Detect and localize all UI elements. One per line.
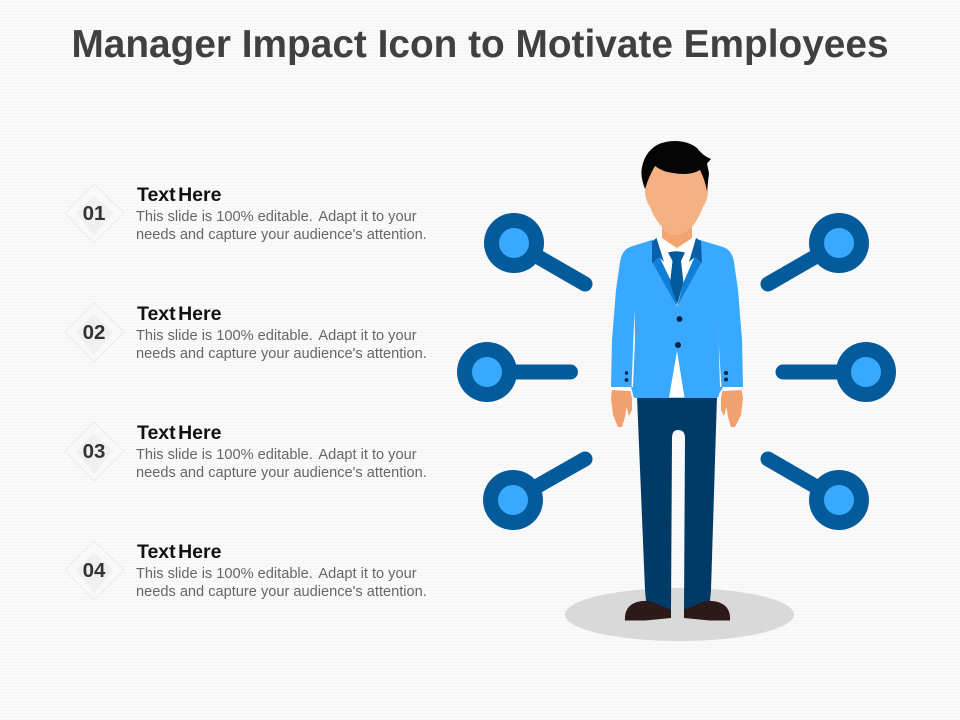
- heading 01: Text Here: [137, 184, 221, 206]
- heading 02: Text Here: [137, 303, 221, 325]
- face: [645, 158, 708, 235]
- body text 04: [136, 566, 427, 600]
- body text 04: needs and capture your audience's attention.: [136, 584, 427, 600]
- number 02: 02: [83, 321, 105, 344]
- shirt cuffs: [612, 386, 741, 391]
- icon: diamond 03: [64, 422, 124, 482]
- icon: node upper right: [768, 213, 869, 284]
- heading 03: Text Here: [137, 422, 221, 444]
- icon: node middle right: [783, 342, 896, 402]
- body text 03: This slide is 100% editable. Adapt it to your: [136, 447, 417, 463]
- body text 01: [136, 209, 427, 243]
- number 01: 01: [83, 202, 105, 225]
- number 03: 03: [83, 440, 105, 463]
- icon: node lower left: [483, 459, 585, 530]
- floor shadow: [565, 588, 794, 641]
- icon: node middle left: [457, 342, 570, 402]
- shirt panel below buttons: [669, 351, 684, 398]
- body text 01: This slide is 100% editable. Adapt it to your: [136, 209, 417, 225]
- body text 04: This slide is 100% editable. Adapt it to your: [136, 566, 417, 582]
- sleeve creases: [632, 305, 722, 387]
- body text 01: needs and capture your audience's attention.: [136, 227, 427, 243]
- heading 04: Text Here: [137, 541, 221, 563]
- icon: diamond 01: [64, 184, 124, 244]
- hands: [611, 388, 743, 427]
- figure: manager: [611, 141, 743, 620]
- necktie: [668, 251, 685, 305]
- jacket: [611, 240, 743, 398]
- trousers: [637, 396, 717, 612]
- jacket buttons: [625, 316, 728, 382]
- shoes: [625, 601, 730, 620]
- item 03: [64, 422, 427, 482]
- lapels: [652, 256, 702, 307]
- lapel shadows: [652, 238, 702, 263]
- neck: [662, 222, 692, 248]
- body text 02: [136, 328, 427, 362]
- item 02: [64, 302, 427, 362]
- icon: diamond 04: [64, 540, 124, 600]
- body text 02: This slide is 100% editable. Adapt it to your: [136, 328, 417, 344]
- item 04: [64, 540, 427, 600]
- number 04: 04: [83, 559, 105, 582]
- title: Manager Impact Icon to Motivate Employees: [71, 23, 889, 66]
- body text 03: [136, 447, 427, 481]
- body text 03: needs and capture your audience's attention.: [136, 465, 427, 481]
- shirt and collar: [652, 238, 702, 307]
- item 01: [64, 184, 427, 244]
- body text 02: needs and capture your audience's attention.: [136, 346, 427, 362]
- icon: node upper left: [484, 213, 585, 284]
- icon: node lower right: [768, 459, 869, 530]
- hair: [641, 141, 711, 191]
- icon: diamond 02: [64, 302, 124, 362]
